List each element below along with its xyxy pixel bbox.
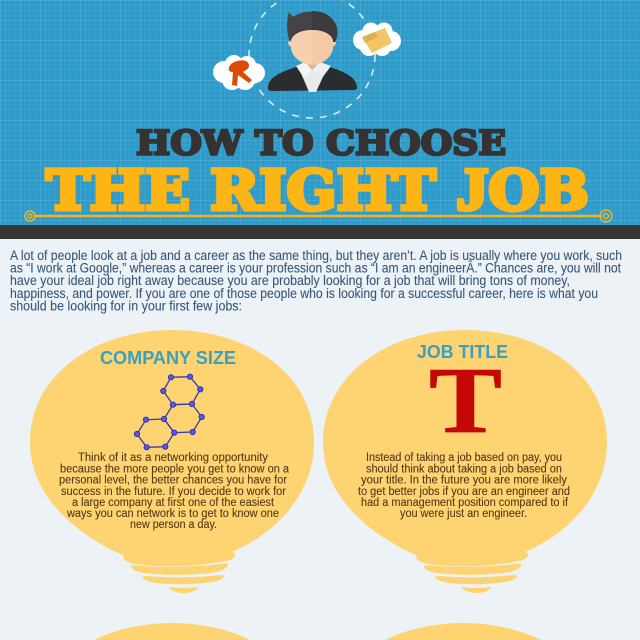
body text <box>358 452 570 520</box>
bulb shape <box>323 330 607 565</box>
body text: ways you can network is to get to know one <box>66 508 279 520</box>
header banner <box>0 0 640 239</box>
body text: because the more people you get to know on a <box>60 463 290 475</box>
intro paragraph: have your ideal job right away because you are probably looking for a job that will bring tons of money, <box>10 273 570 288</box>
title: THE RIGHT JOB <box>46 156 589 222</box>
bulb shape <box>30 330 314 565</box>
panel: next row bulb, right (cropped) <box>385 623 541 640</box>
body text: a large company at first one of the easiest <box>72 497 275 509</box>
icon: cloud with ticket <box>353 22 401 56</box>
body text: new person a day. <box>130 519 217 531</box>
title <box>46 124 589 222</box>
bulb base stripes <box>123 552 235 593</box>
icon: red letter T: T <box>429 349 502 453</box>
icon: cloud with award ribbon <box>213 55 265 90</box>
heading: COMPANY SIZE <box>100 347 236 368</box>
panel: company size bulb <box>30 330 314 593</box>
heading: JOB TITLE <box>417 341 508 362</box>
title underline with end rings <box>25 210 612 222</box>
title: HOW TO CHOOSE <box>136 124 506 164</box>
body text: Instead of taking a job based on pay, you <box>366 452 562 464</box>
body text: your title. In the future you are more likely <box>361 475 567 487</box>
icon: businessman avatar <box>268 11 357 92</box>
body text: Think of it as a networking opportunity <box>78 452 268 464</box>
body text: had a management position compared to if <box>361 497 569 509</box>
body text: personal level, the better chances you have for <box>59 475 287 487</box>
body text <box>59 452 290 531</box>
body text: you were just an engineer. <box>400 508 527 520</box>
body text: should think about taking a job based on <box>366 463 562 475</box>
bulb base stripes <box>416 552 528 593</box>
icon: hexagon network <box>134 374 204 450</box>
intro paragraph: should be looking for in your first few jobs: <box>10 298 242 314</box>
panel: next row bulb, left (cropped) <box>94 623 250 640</box>
body text: success in the future. If you decide to work for <box>61 486 286 498</box>
panel: job title bulb <box>323 330 607 593</box>
body text: to get better jobs if you are an engineer and <box>358 486 570 498</box>
intro paragraph <box>10 248 622 314</box>
dashed orbit circle <box>249 0 375 118</box>
